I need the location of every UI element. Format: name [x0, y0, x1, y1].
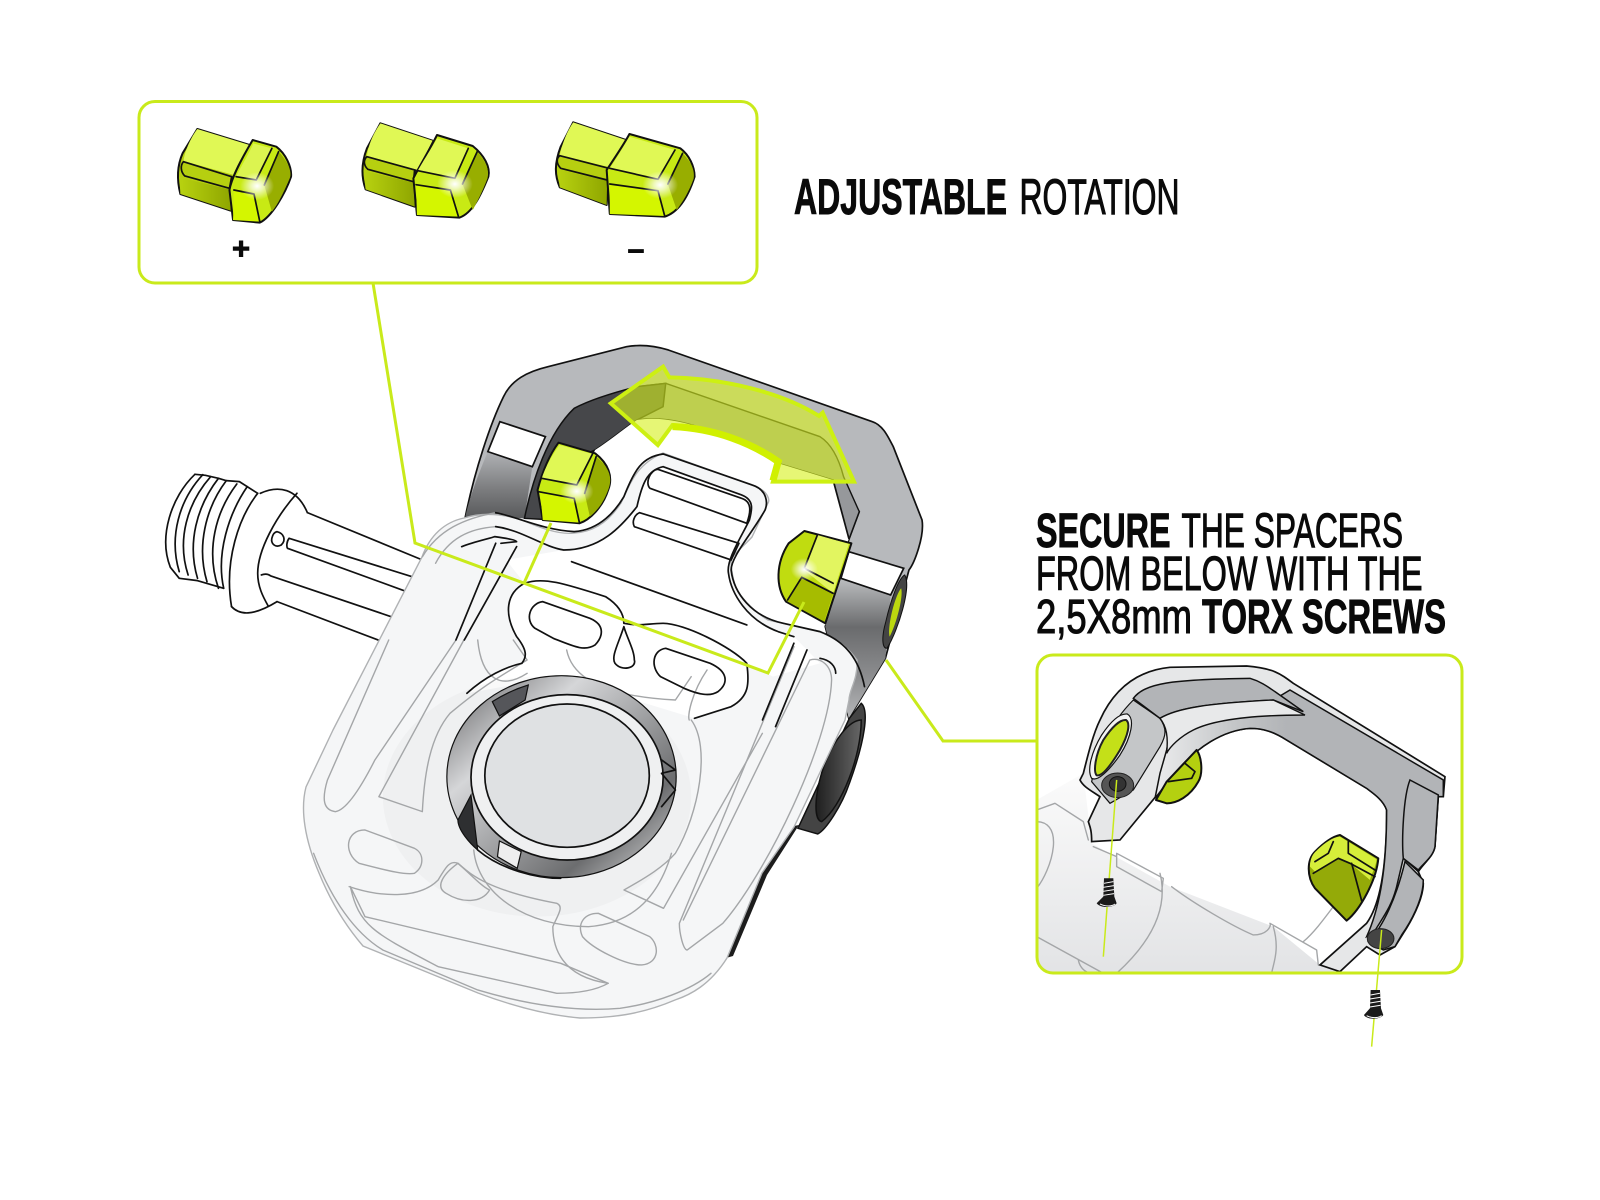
panel: rotation spacer options	[139, 102, 757, 283]
inset cage main face	[1155, 690, 1443, 937]
cleat cap: outer ring	[447, 676, 676, 878]
callout line: spacers to option box	[373, 283, 804, 673]
dark plate edge	[726, 825, 799, 958]
heading: secure the spacers: 2,5X8mm	[1036, 591, 1192, 644]
heading: secure the spacers	[1036, 505, 1446, 644]
main illustration: pedal	[166, 283, 1037, 1018]
teardrop slot	[614, 627, 635, 668]
icon: spacer middle rotation	[362, 123, 489, 218]
inset light arch	[1160, 700, 1305, 753]
rotation arrow	[611, 367, 854, 482]
cap centre disc	[485, 704, 649, 847]
heading: secure the spacers: TORX SCREWS	[1202, 591, 1446, 644]
inner arch wall behind arrow	[637, 383, 859, 547]
inset cage silhouette	[1080, 666, 1445, 972]
screw left	[1097, 878, 1117, 907]
slot one	[529, 602, 601, 648]
heading: secure the spacers: FROM BELOW WITH THE	[1036, 548, 1422, 601]
minus label: –	[628, 233, 644, 266]
dark inner wall	[524, 383, 666, 520]
inset screw head right	[1367, 929, 1394, 949]
screw right	[1364, 930, 1383, 1047]
spacer right	[778, 531, 851, 623]
inset screw guide line	[1103, 780, 1117, 957]
cap notch	[497, 841, 521, 868]
right band shading	[825, 578, 891, 718]
panel frame	[139, 102, 757, 283]
inset cage top strip	[1133, 678, 1303, 718]
inset left spacer	[1156, 750, 1201, 803]
dark wedge top	[492, 685, 528, 716]
pedal axle	[166, 474, 422, 640]
slot two	[654, 648, 725, 695]
heading: adjustable rotation: ROTATION	[1020, 169, 1180, 225]
lower body outlines	[314, 640, 832, 1009]
translucent pedal body plate	[304, 453, 857, 1018]
inset lower body	[1038, 806, 1336, 972]
icon: spacer maximum rotation	[178, 129, 291, 223]
white insert right	[841, 552, 904, 595]
panel: underside inset	[1037, 655, 1462, 1047]
white tongue and keyhole fill	[467, 467, 820, 718]
shadow under cap	[383, 677, 691, 917]
upper plate black outlines	[422, 443, 864, 727]
white insert left	[488, 422, 545, 467]
callout line: side hole to inset panel	[886, 660, 1037, 741]
inset right vertical block	[1403, 780, 1438, 870]
heading: secure the spacers: THE SPACERS	[1182, 505, 1403, 558]
inset left pad	[1092, 700, 1165, 803]
icon: spacer minimum rotation	[556, 122, 695, 217]
inset right spacer	[1309, 835, 1378, 921]
dark wedge bottom	[458, 795, 478, 850]
heading: secure the spacers: SECURE	[1036, 505, 1170, 558]
pedal cage	[465, 345, 922, 718]
heading: adjustable rotation: ADJUSTABLE	[794, 169, 1007, 225]
plus label: +	[232, 231, 250, 266]
inset frame	[1037, 655, 1462, 973]
inset yellow hole	[1090, 714, 1131, 779]
side boss and dark edge	[798, 703, 865, 834]
spacer left	[538, 443, 610, 523]
left band shading	[465, 452, 532, 518]
cap ring	[471, 695, 663, 860]
white opening	[558, 419, 849, 625]
side hole with yellow	[883, 575, 907, 648]
inset screw head left	[1102, 773, 1134, 798]
inset artwork	[1037, 666, 1445, 977]
